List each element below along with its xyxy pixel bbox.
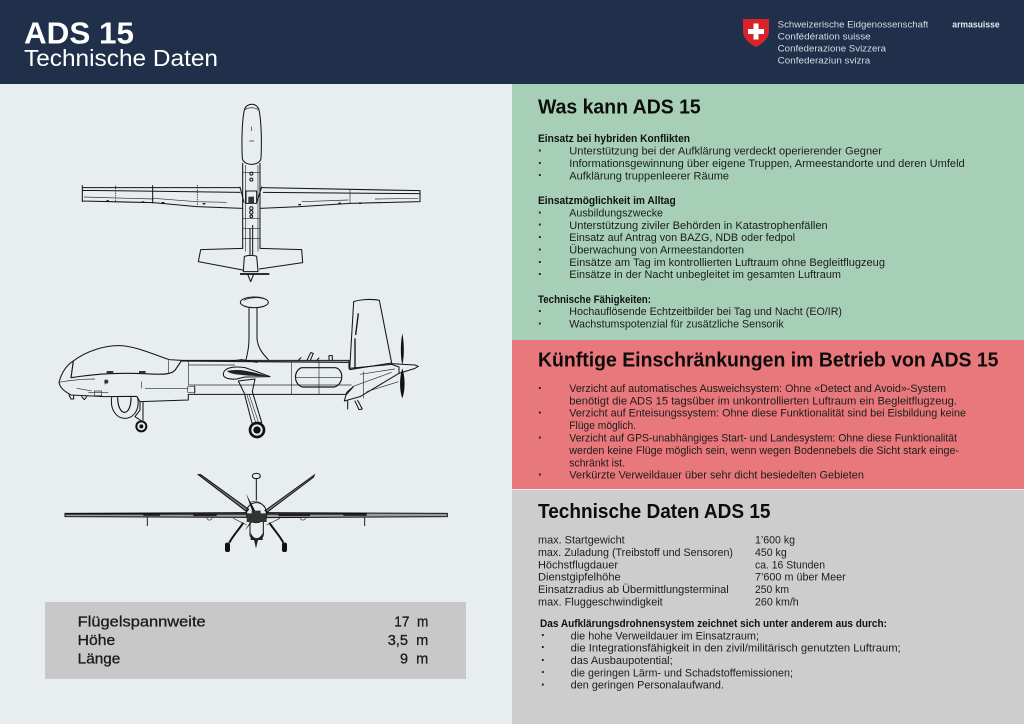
panel: future limitations xyxy=(512,340,1024,489)
limitations list: schränkt ist. xyxy=(569,457,625,469)
engine and propeller xyxy=(392,364,418,373)
specification table: 7’600 m über Meer xyxy=(755,572,846,584)
length row: Länge xyxy=(78,650,120,667)
limitations list: · xyxy=(538,430,542,445)
system qualities list: die hohe Verweildauer im Einsatzraum; xyxy=(571,630,759,642)
technical capabilities list: · xyxy=(538,316,542,331)
everyday use list: · xyxy=(538,242,542,257)
panel: dimensions xyxy=(45,602,466,679)
system qualities list: die Integrationsfähigkeit in den zivil/militärisch genutzten Luftraum; xyxy=(571,642,901,654)
limitations list: · xyxy=(538,380,542,395)
panel: technical data xyxy=(512,490,1024,724)
system qualities list: · xyxy=(541,665,545,680)
limitations list: Flüge möglich. xyxy=(569,420,636,432)
limitations list: · xyxy=(538,467,542,482)
limitations list: Verzicht auf Enteisungssystem: Ohne diese Funktionalität sind bei Eisbildung keine xyxy=(569,408,966,420)
limitations list: Verzicht auf GPS-unabhängiges Start- und Landesystem: Ohne diese Funktionalität xyxy=(569,433,957,445)
specification table xyxy=(538,535,846,608)
length row: 9 m xyxy=(400,650,428,667)
limitations list: · xyxy=(538,405,542,420)
technical capabilities list: · xyxy=(538,303,542,318)
everyday use list: Einsatzmöglichkeit im Alltag xyxy=(538,195,676,207)
hybrid conflicts list: Informationsgewinnung über eigene Truppen, Armeestandorte und deren Umfeld xyxy=(569,158,965,170)
hybrid conflicts list: · xyxy=(538,143,542,158)
specification table: 250 km xyxy=(755,584,789,596)
system qualities list: · xyxy=(541,628,545,643)
panel: left drawings background xyxy=(0,84,512,724)
limitations list: werden keine Flüge möglich sein, wenn wegen Bodennebels die Sicht stark einge- xyxy=(568,445,959,457)
hybrid conflicts list xyxy=(538,133,965,183)
everyday use list: Überwachung von Armeestandorten xyxy=(569,244,744,256)
height row xyxy=(78,632,428,649)
drawing: front view of drone xyxy=(65,473,447,552)
confederation names: Confédération suisse xyxy=(778,31,871,42)
everyday use list: Einsätze in der Nacht unbegleitet im gesamten Luftraum xyxy=(569,269,841,281)
specification table: max. Startgewicht xyxy=(538,535,625,547)
specification table: ca. 16 Stunden xyxy=(755,559,825,571)
limitations list: Verkürzte Verweildauer über sehr dicht besiedelten Gebieten xyxy=(569,470,864,482)
wing pylons xyxy=(147,517,365,526)
landing gear xyxy=(229,523,243,543)
armasuisse label: armasuisse xyxy=(952,19,1000,30)
specification table: Höchstflugdauer xyxy=(538,559,618,571)
specification table: 1’600 kg xyxy=(755,535,795,547)
system qualities list: Das Aufklärungsdrohnensystem zeichnet sich unter anderem aus durch: xyxy=(540,618,887,630)
specification table: Dienstgipfelhöhe xyxy=(538,572,621,584)
everyday use list xyxy=(538,195,885,281)
everyday use list: · xyxy=(538,230,542,244)
antennas xyxy=(298,353,332,360)
everyday use list: Unterstützung ziviler Behörden in Katastrophenfällen xyxy=(569,220,828,232)
limitations list xyxy=(538,380,966,482)
propeller xyxy=(246,493,257,516)
wingspan row: 17 m xyxy=(394,614,428,630)
everyday use list: · xyxy=(538,205,542,220)
system qualities list: die geringen Lärm- und Schadstoffemissionen; xyxy=(571,667,793,679)
everyday use list: Einsätze am Tag im kontrollierten Luftraum ohne Begleitflugzeug xyxy=(569,257,885,269)
hybrid conflicts list: · xyxy=(538,168,542,183)
icon: Swiss shield xyxy=(743,19,769,47)
system qualities list: · xyxy=(541,677,545,692)
drawing: top view of drone xyxy=(82,104,420,282)
heading: Was kann ADS 15 xyxy=(538,96,701,118)
wingspan row: Flügelspannweite xyxy=(78,614,206,630)
confederation names xyxy=(778,19,929,66)
technical capabilities list: Technische Fähigkeiten: xyxy=(538,294,651,306)
header xyxy=(0,0,1024,84)
heading: Technische Daten ADS 15 xyxy=(538,501,770,523)
confederation names: Confederazione Svizzera xyxy=(778,43,887,54)
title: ADS 15 xyxy=(24,15,134,50)
nose gear xyxy=(111,398,138,418)
wingspan row xyxy=(78,614,428,630)
technical capabilities list xyxy=(538,294,842,331)
hybrid conflicts list: · xyxy=(538,155,542,170)
panel: capabilities xyxy=(512,84,1024,340)
system qualities list: den geringen Personalaufwand. xyxy=(571,680,724,692)
mast xyxy=(252,473,260,479)
specification table: max. Fluggeschwindigkeit xyxy=(538,596,663,608)
confederation names: Schweizerische Eidgenossenschaft xyxy=(778,19,929,30)
specification table: max. Zuladung (Treibstoff und Sensoren) xyxy=(538,547,733,559)
specification table: 450 kg xyxy=(755,547,787,559)
hybrid conflicts list: Aufklärung truppenleerer Räume xyxy=(569,170,729,182)
subtitle: Technische Daten xyxy=(24,45,218,71)
height row: 3,5 m xyxy=(388,632,428,649)
specification table: 260 km/h xyxy=(755,596,799,608)
length row xyxy=(78,650,428,667)
technical capabilities list: Wachstumspotenzial für zusätzliche Sensorik xyxy=(569,319,784,331)
everyday use list: Einsatz auf Antrag von BAZG, NDB oder fedpol xyxy=(569,232,795,244)
system qualities list xyxy=(540,618,901,692)
confederation names: Confederaziun svizra xyxy=(778,55,871,66)
heading: Künftige Einschränkungen im Betrieb von ADS 15 xyxy=(538,350,998,372)
fin and mast xyxy=(350,299,392,370)
everyday use list: · xyxy=(538,217,542,232)
system qualities list: das Ausbaupotential; xyxy=(571,655,673,667)
tail booms xyxy=(198,475,249,512)
drawing: side view of drone xyxy=(59,297,418,438)
system qualities list: · xyxy=(541,640,545,655)
limitations list: benötigt die ADS 15 tagsüber im unkontrollierten Luftraum ein Begleitflugzeug. xyxy=(569,395,957,407)
everyday use list: Ausbildungszwecke xyxy=(569,208,663,220)
height row: Höhe xyxy=(78,632,115,649)
everyday use list: · xyxy=(538,254,542,269)
hybrid conflicts list: Einsatz bei hybriden Konflikten xyxy=(538,133,690,145)
hybrid conflicts list: Unterstützung bei der Aufklärung verdeckt operierender Gegner xyxy=(569,146,882,158)
everyday use list: · xyxy=(538,266,542,281)
main gear xyxy=(238,379,262,424)
fuselage xyxy=(250,521,263,539)
specification table: Einsatzradius ab Übermittlungsterminal xyxy=(538,584,729,596)
technical capabilities list: Hochauflösende Echtzeitbilder bei Tag und Nacht (EO/IR) xyxy=(569,306,842,318)
system qualities list: · xyxy=(541,652,545,667)
wing root xyxy=(223,360,270,379)
limitations list: Verzicht auf automatisches Ausweichsystem: Ohne «Detect and Avoid»-System xyxy=(569,383,946,395)
